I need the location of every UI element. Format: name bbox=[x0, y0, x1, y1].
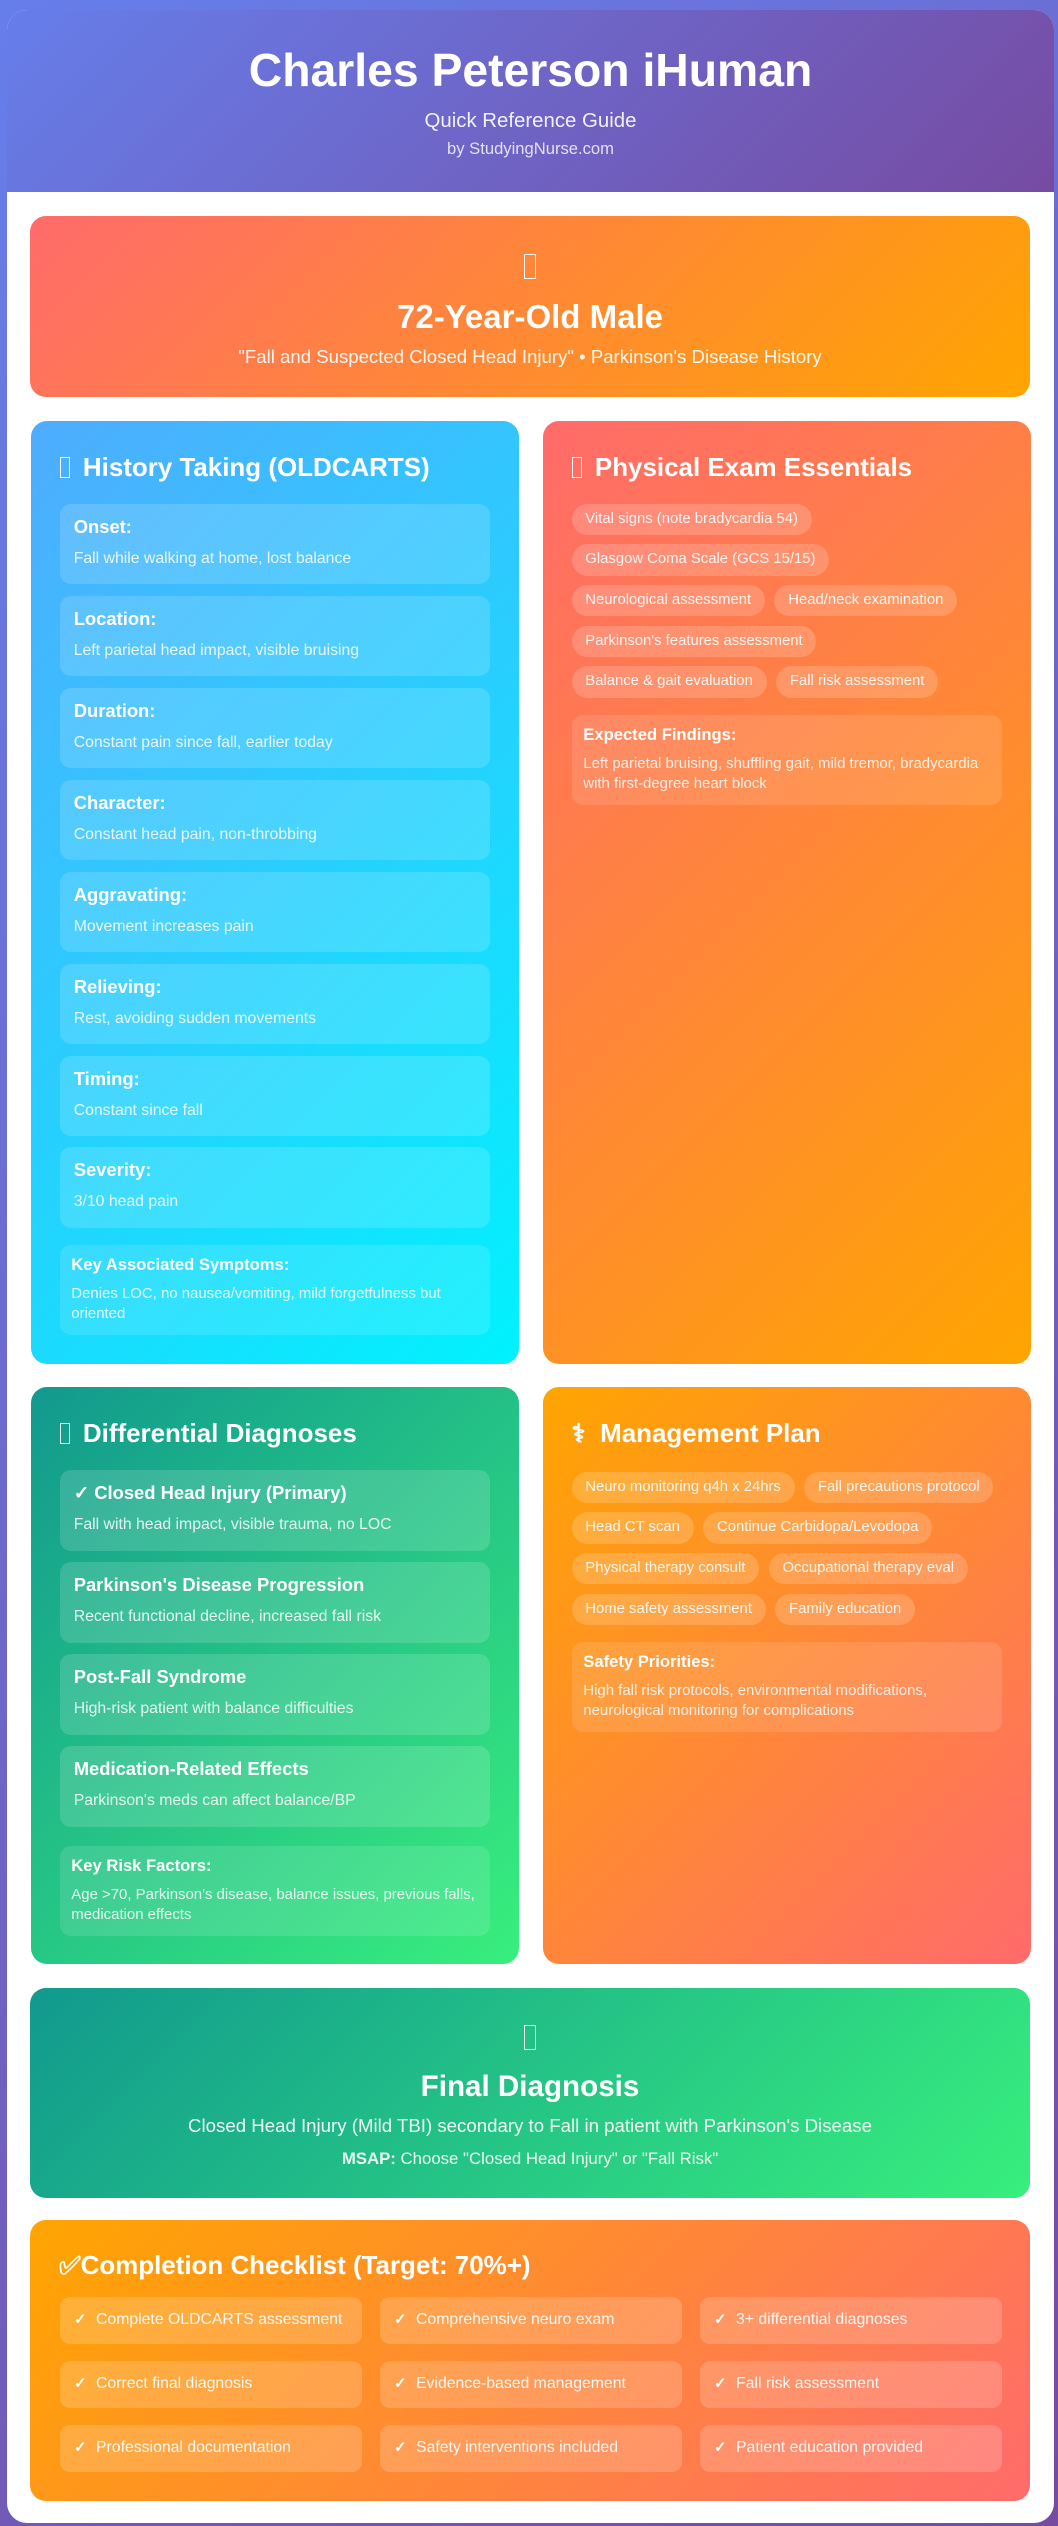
item: relieving bbox=[60, 964, 490, 1044]
item: post-fall syndrome: Post-Fall Syndrome bbox=[74, 1666, 246, 1687]
item: closed head injury: Fall with head impact, visible trauma, no LOC bbox=[74, 1516, 392, 1533]
check: differentials bbox=[700, 2297, 1002, 2344]
final diagnosis heading: Final Diagnosis bbox=[421, 2070, 639, 2102]
icon: missing glyph box bbox=[60, 457, 70, 478]
icon: missing glyph box bbox=[572, 457, 582, 478]
item: location bbox=[60, 596, 490, 676]
item: timing: Timing: bbox=[74, 1068, 140, 1088]
heading: physical exam: Physical Exam Essentials bbox=[595, 454, 912, 482]
item: severity bbox=[60, 1147, 490, 1228]
subtitle: Quick Reference Guide bbox=[425, 110, 636, 132]
panel: completion checklist bbox=[30, 2220, 1030, 2500]
item: onset bbox=[60, 504, 490, 584]
panel: final diagnosis bbox=[30, 1988, 1030, 2198]
item: onset: Onset: bbox=[74, 516, 132, 536]
item: duration: Duration: bbox=[74, 700, 155, 720]
callout: key risk factors: Key Risk Factors: bbox=[71, 1856, 211, 1875]
exam tags: Vital signs (note bradycardia 54) bbox=[585, 510, 798, 526]
header banner bbox=[7, 10, 1054, 192]
callout: key associated symptoms: Denies LOC, no nausea/vomiting, mild forgetfulness but oriented bbox=[71, 1285, 441, 1322]
callout: key risk factors bbox=[60, 1846, 490, 1936]
callout: expected findings: Expected Findings: bbox=[583, 725, 736, 744]
check: safety bbox=[380, 2425, 682, 2472]
check: education bbox=[700, 2425, 1002, 2472]
check: OLDCARTS: ✓ bbox=[74, 2311, 87, 2328]
item: character bbox=[60, 780, 490, 860]
title: Charles Peterson iHuman bbox=[249, 44, 812, 96]
check: documentation: Professional documentation bbox=[96, 2439, 291, 2456]
item: timing: Constant since fall bbox=[74, 1102, 203, 1118]
check: differentials: 3+ differential diagnoses bbox=[736, 2311, 907, 2328]
callout: expected findings bbox=[572, 715, 1002, 805]
callout: key risk factors: Age >70, Parkinson's disease, balance issues, previous falls, medication effects bbox=[71, 1886, 475, 1922]
management tags: Neuro monitoring q4h x 24hrs bbox=[585, 1478, 781, 1494]
exam tags bbox=[572, 504, 957, 698]
item: location: Left parietal head impact, visible bruising bbox=[74, 642, 359, 658]
check: safety: Safety interventions included bbox=[416, 2439, 618, 2456]
item: closed head injury bbox=[60, 1470, 490, 1550]
icon: missing glyph box bbox=[60, 1423, 70, 1444]
item: medication effects: Parkinson's meds can affect balance/BP bbox=[74, 1792, 356, 1809]
heading: management plan: Management Plan bbox=[600, 1420, 821, 1448]
check: OLDCARTS bbox=[60, 2297, 362, 2344]
check: management bbox=[380, 2361, 682, 2408]
check: safety: ✓ bbox=[394, 2439, 407, 2456]
item: parkinson's progression: Recent functional decline, increased fall risk bbox=[74, 1608, 381, 1625]
check: management: Evidence-based management bbox=[416, 2375, 626, 2392]
exam tags: Head/neck examination bbox=[788, 592, 943, 608]
check: fall risk: ✓ bbox=[714, 2375, 727, 2392]
panel: history taking bbox=[30, 421, 518, 1364]
check: OLDCARTS: Complete OLDCARTS assessment bbox=[96, 2311, 342, 2328]
item: duration: Constant pain since fall, earlier today bbox=[74, 734, 333, 750]
callout: safety priorities bbox=[572, 1642, 1002, 1732]
panel: differential diagnoses bbox=[30, 1387, 518, 1964]
check: neuro exam: ✓ bbox=[394, 2311, 407, 2328]
check: fall risk: Fall risk assessment bbox=[736, 2375, 879, 2392]
item: character: Character: bbox=[74, 792, 166, 812]
item: timing bbox=[60, 1056, 490, 1136]
management tags: Physical therapy consult bbox=[585, 1560, 745, 1576]
exam tags: Glasgow Coma Scale (GCS 15/15) bbox=[585, 551, 815, 567]
management tags: Family education bbox=[789, 1601, 901, 1617]
callout: key associated symptoms bbox=[60, 1245, 490, 1335]
callout: key associated symptoms: Key Associated Symptoms: bbox=[71, 1255, 289, 1274]
management tags bbox=[572, 1472, 993, 1625]
heading: differential diagnoses: Differential Diagnoses bbox=[83, 1420, 357, 1448]
management tags: Continue Carbidopa/Levodopa bbox=[717, 1519, 918, 1535]
item: location: Location: bbox=[74, 608, 156, 628]
check: final diagnosis: Correct final diagnosis bbox=[96, 2375, 252, 2392]
item: duration bbox=[60, 688, 490, 768]
heading: completion checklist: Completion Checklist (Target: 70%+) bbox=[81, 2252, 530, 2280]
item: character: Constant head pain, non-throbbing bbox=[74, 826, 317, 842]
callout: safety priorities: High fall risk protocols, environmental modifications, neurological monitoring for complications bbox=[583, 1682, 927, 1718]
item: aggravating bbox=[60, 872, 490, 952]
check: differentials: ✓ bbox=[714, 2311, 727, 2328]
check: documentation: ✓ bbox=[74, 2439, 87, 2456]
callout: safety priorities: Safety Priorities: bbox=[583, 1652, 715, 1671]
management tags: Head CT scan bbox=[585, 1519, 680, 1535]
panel: management plan bbox=[542, 1387, 1030, 1964]
exam tags: Parkinson's features assessment bbox=[585, 633, 803, 649]
check: education: ✓ bbox=[714, 2439, 727, 2456]
icon: missing glyph box bbox=[524, 2025, 536, 2050]
item: onset: Fall while walking at home, lost balance bbox=[74, 550, 351, 566]
management tags: Occupational therapy eval bbox=[782, 1560, 954, 1576]
exam tags: Balance & gait evaluation bbox=[585, 673, 753, 689]
heading: completion checklist: ✅︎ bbox=[59, 2251, 81, 2281]
item: medication effects bbox=[60, 1746, 490, 1826]
item: closed head injury: ✓ Closed Head Injury (Primary) bbox=[74, 1482, 347, 1503]
item: relieving: Rest, avoiding sudden movements bbox=[74, 1010, 316, 1026]
item: post-fall syndrome: High-risk patient with balance difficulties bbox=[74, 1700, 354, 1717]
heading: history taking: History Taking (OLDCARTS) bbox=[83, 454, 430, 482]
item: parkinson's progression bbox=[60, 1562, 490, 1642]
icon: missing glyph box bbox=[524, 254, 536, 279]
check: final diagnosis bbox=[60, 2361, 362, 2408]
item: severity: 3/10 head pain bbox=[74, 1193, 178, 1210]
check: neuro exam: Comprehensive neuro exam bbox=[416, 2311, 614, 2328]
MSAP note: MSAP: Choose "Closed Head Injury" or "Fall Risk" bbox=[342, 2149, 718, 2168]
callout: expected findings: Left parietal bruising, shuffling gait, mild tremor, bradycardia with first-degree heart block bbox=[583, 755, 978, 792]
item: medication effects: Medication-Related Effects bbox=[74, 1758, 309, 1779]
exam tags: Fall risk assessment bbox=[790, 673, 924, 689]
item: aggravating: Movement increases pain bbox=[74, 918, 254, 934]
management tags: Home safety assessment bbox=[585, 1601, 752, 1617]
item: severity: Severity: bbox=[74, 1159, 151, 1180]
check: education: Patient education provided bbox=[736, 2439, 923, 2456]
heading: management plan: ⚕ bbox=[572, 1420, 586, 1448]
item: relieving: Relieving: bbox=[74, 976, 162, 996]
item: aggravating: Aggravating: bbox=[74, 884, 187, 904]
check: neuro exam bbox=[380, 2297, 682, 2344]
exam tags: Neurological assessment bbox=[585, 592, 751, 608]
diagnosis statement: Closed Head Injury (Mild TBI) secondary to Fall in patient with Parkinson's Disease bbox=[188, 2114, 872, 2136]
check: documentation bbox=[60, 2425, 362, 2472]
byline: by StudyingNurse.com bbox=[447, 139, 614, 158]
check: final diagnosis: ✓ bbox=[74, 2375, 87, 2392]
item: post-fall syndrome bbox=[60, 1654, 490, 1734]
check: fall risk bbox=[700, 2361, 1002, 2408]
item: parkinson's progression: Parkinson's Disease Progression bbox=[74, 1574, 364, 1595]
chief complaint: "Fall and Suspected Closed Head Injury" • Parkinson's Disease History bbox=[238, 346, 822, 367]
patient heading: 72-Year-Old Male bbox=[397, 298, 663, 335]
panel: physical exam bbox=[542, 421, 1030, 1364]
panel: patient summary bbox=[30, 216, 1030, 397]
management tags: Fall precautions protocol bbox=[818, 1478, 980, 1494]
check: management: ✓ bbox=[394, 2375, 407, 2392]
